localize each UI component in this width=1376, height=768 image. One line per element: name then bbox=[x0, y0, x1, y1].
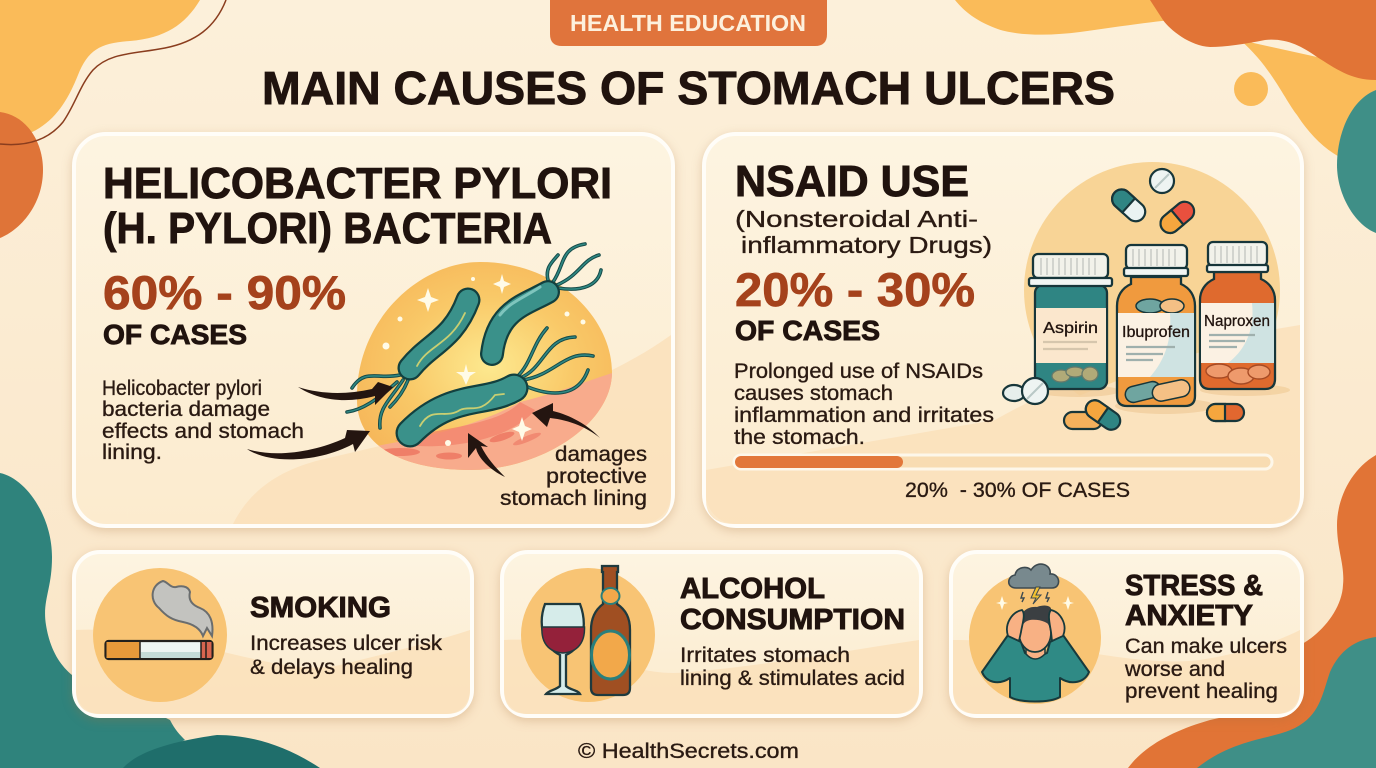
description: alcohol bbox=[680, 644, 905, 690]
description: smoking bbox=[250, 632, 443, 679]
description: smoking: & delays healing bbox=[250, 656, 413, 679]
statistic caption: OF CASES bbox=[735, 315, 880, 346]
bottle: aspirin: Aspirin bbox=[1043, 320, 1098, 337]
badge: health education: HEALTH EDUCATION bbox=[570, 10, 806, 36]
description: nsaid: inflammation and irritates bbox=[734, 404, 994, 427]
panel: nsaid use bbox=[704, 134, 1302, 526]
description: h. pylori bbox=[102, 377, 304, 464]
description: nsaid: causes stomach bbox=[734, 382, 893, 405]
description: stress bbox=[1124, 635, 1287, 703]
heading: smoking: SMOKING bbox=[250, 592, 391, 624]
panel: smoking bbox=[74, 552, 472, 716]
description: stress: Can make ulcers bbox=[1125, 635, 1287, 658]
subheading bbox=[735, 206, 992, 258]
flagella bbox=[347, 244, 601, 428]
heading: alcohol: CONSUMPTION bbox=[680, 604, 905, 636]
panel: stress bbox=[951, 552, 1302, 716]
description: h. pylori: Helicobacter pylori bbox=[102, 377, 262, 400]
shadows bbox=[1036, 384, 1290, 414]
callout: damages lining bbox=[500, 443, 647, 510]
footer credit: © HealthSecrets.com bbox=[578, 740, 799, 763]
description: nsaid: Prolonged use of NSAIDs bbox=[734, 360, 983, 383]
callout: damages lining: protective bbox=[546, 465, 647, 488]
sparkles bbox=[382, 274, 586, 446]
title: MAIN CAUSES OF STOMACH ULCERS bbox=[262, 62, 1115, 114]
description: nsaid: the stomach. bbox=[734, 426, 865, 449]
description: alcohol: Irritates stomach bbox=[680, 644, 850, 667]
falling pills and tablets bbox=[1003, 169, 1244, 433]
badge: health education bbox=[550, 0, 827, 46]
statistic: 20% - 30%: 20% - 30% bbox=[735, 263, 975, 316]
heading: h. pylori bbox=[103, 159, 612, 253]
description: h. pylori: effects and stomach bbox=[102, 420, 304, 443]
statistic: 60% - 90%: 60% - 90% bbox=[103, 266, 346, 319]
heading: stress: ANXIETY bbox=[1125, 600, 1253, 632]
icon: stressed person bbox=[969, 564, 1101, 704]
description: alcohol: lining & stimulates acid bbox=[680, 667, 905, 690]
heading: alcohol bbox=[680, 573, 905, 636]
heading: h. pylori: HELICOBACTER PYLORI bbox=[103, 159, 612, 208]
bottle: ibuprofen bbox=[1117, 245, 1195, 406]
arrows pointing to bacteria bbox=[247, 382, 600, 477]
illustration: medicine bottles bbox=[1003, 162, 1290, 433]
progress caption: 20% - 30% OF CASES bbox=[905, 479, 1130, 502]
illustration: bacteria in stomach bbox=[247, 244, 615, 480]
bottle: aspirin bbox=[1029, 254, 1112, 389]
icon: wine and beer bottle bbox=[521, 566, 655, 702]
panel: h. pylori bbox=[74, 134, 673, 526]
bottle: ibuprofen: Ibuprofen bbox=[1122, 324, 1190, 341]
callout: damages lining: stomach lining bbox=[500, 487, 647, 510]
storm cloud bbox=[1009, 564, 1059, 588]
bacterium bodies bbox=[410, 287, 548, 433]
bottle: naproxen bbox=[1200, 242, 1275, 389]
description: smoking: Increases ulcer risk bbox=[250, 632, 443, 655]
heading: stress bbox=[1125, 570, 1263, 632]
hands bbox=[1007, 610, 1065, 641]
progress bar: 20-30% bbox=[734, 455, 1272, 469]
heading: h. pylori: (H. PYLORI) BACTERIA bbox=[103, 204, 552, 253]
statistic caption: OF CASES bbox=[103, 319, 247, 350]
description: nsaid bbox=[734, 360, 994, 449]
description: h. pylori: bacteria damage bbox=[102, 398, 270, 421]
heading: nsaid use: NSAID USE bbox=[735, 157, 969, 206]
subheading: inflammatory Drugs) bbox=[741, 232, 992, 258]
description: stress: worse and bbox=[1124, 658, 1225, 681]
description: h. pylori: lining. bbox=[102, 441, 162, 464]
heading: stress: STRESS & bbox=[1125, 570, 1263, 602]
accent dot bbox=[1234, 72, 1268, 106]
heading: alcohol: ALCOHOL bbox=[680, 573, 825, 605]
subheading: (Nonsteroidal Anti- bbox=[735, 206, 978, 232]
torso bbox=[982, 635, 1089, 702]
neck and head bbox=[1026, 645, 1045, 659]
callout: damages lining: damages bbox=[555, 443, 647, 466]
icon: cigarette bbox=[93, 568, 227, 702]
description: stress: prevent healing bbox=[1125, 680, 1278, 703]
bottle: naproxen: Naproxen bbox=[1204, 313, 1270, 330]
panel: alcohol bbox=[502, 552, 921, 716]
